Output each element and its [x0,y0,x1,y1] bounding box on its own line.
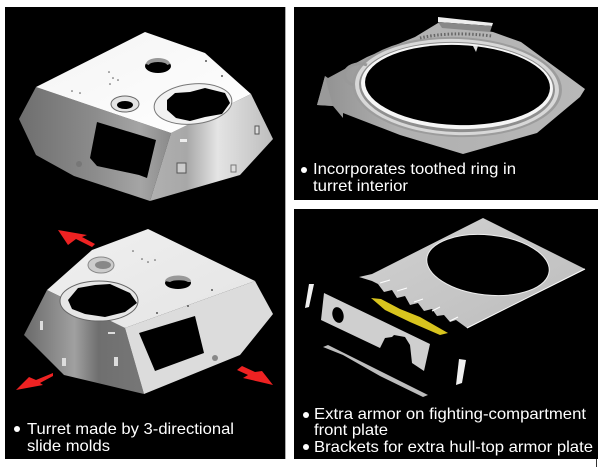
caption: ring [301,161,516,195]
bracket strip [323,345,428,397]
side plate left [305,284,314,308]
caption: armor: front plate [314,422,388,439]
turret: lower view [24,229,273,394]
arrow: lower-left [16,373,53,390]
hull-top plate [359,218,585,328]
panel: turret slide molds [5,7,286,459]
front plate [321,293,430,371]
yellow armor strip [371,298,448,335]
caption: turret: Turret made by 3-directional [27,421,234,438]
panel: extra armor [294,209,598,467]
caption: armor: Brackets for extra hull-top armor plate [314,439,593,456]
ring part [317,17,585,154]
caption: turret [14,421,234,455]
caption: armor [303,406,593,456]
caption: ring: turret interior [313,178,409,195]
arrow: lower-right [237,366,273,385]
arrow: up-left [58,230,95,247]
caption: ring: Incorporates toothed ring in [313,161,516,178]
turret: upper view [19,32,273,201]
caption: turret: slide molds [27,438,110,455]
caption: armor: Extra armor on fighting-compartment [314,406,587,423]
side plate right [456,359,466,385]
panel: toothed ring [294,7,598,200]
